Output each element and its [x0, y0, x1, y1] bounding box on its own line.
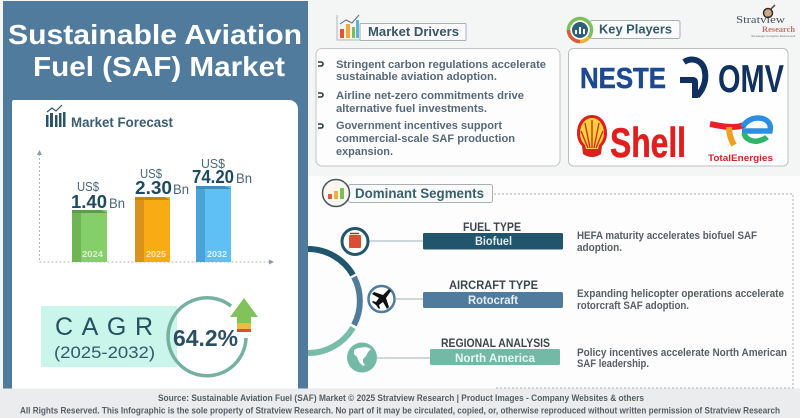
- panel: white forecast card: [12, 100, 298, 389]
- title: [8, 19, 302, 82]
- CAGR callout: (2025-2032): [54, 343, 155, 362]
- drivers list: alternative fuel investments.: [336, 103, 487, 115]
- bar: 2024: 2024: [82, 249, 103, 259]
- logo: OMV: [680, 58, 784, 101]
- logo: Stratview Research: Strategic Insights Delivered: [751, 34, 795, 38]
- heading: dominant segments: Dominant Segments: [355, 185, 484, 201]
- segment descriptions: [577, 230, 787, 370]
- panel: key players: [568, 5, 796, 166]
- heading: key players: [590, 20, 680, 38]
- value: 2032: [192, 157, 252, 187]
- segment: fuel type: FUEL TYPE: [463, 220, 521, 234]
- icon: growth arrow: [230, 298, 258, 332]
- value: 2032: Bn: [236, 170, 252, 186]
- chart axes: [40, 154, 270, 262]
- drivers list: Stringent carbon regulations accelerate: [336, 59, 546, 71]
- bar: 2032: [196, 186, 231, 262]
- value: 2024: [71, 180, 125, 212]
- logo: TotalEnergies: [708, 118, 773, 164]
- bar: 2025: 2025: [146, 249, 166, 259]
- segment: regional analysis: North America: [455, 353, 536, 365]
- logo: Neste: NESTE: [580, 63, 666, 95]
- heading: key players: Key Players: [599, 22, 672, 36]
- logo: Shell: [577, 115, 686, 166]
- segment: aircraft type: AIRCRAFT TYPE: [449, 278, 538, 292]
- panel: market drivers: [316, 15, 560, 166]
- drivers list: Government incentives support: [336, 120, 502, 132]
- segment descriptions: adoption.: [577, 242, 622, 254]
- icon: fuel can: [342, 228, 368, 254]
- title: Fuel (SAF) Market: [33, 51, 285, 82]
- value: 2025: 2.30: [135, 177, 172, 198]
- segment: fuel type: [423, 220, 563, 250]
- value: 2032: 74.20: [192, 167, 234, 187]
- segment descriptions: rotorcraft SAF adoption.: [577, 300, 689, 312]
- logo: Shell: Shell: [610, 119, 686, 166]
- panel: left title and forecast: [3, 1, 308, 389]
- value: 2025: Bn: [173, 181, 189, 197]
- CAGR callout: [41, 298, 258, 376]
- footer: [0, 388, 800, 418]
- icon: key players: [568, 18, 592, 42]
- CAGR callout: 64.2%: [173, 325, 238, 351]
- segment: aircraft type: [423, 278, 563, 308]
- heading: market forecast: Market Forecast: [71, 114, 173, 130]
- value: 2024: US$: [77, 180, 99, 194]
- logos panel: [568, 48, 788, 166]
- heading: market drivers: Market Drivers: [368, 24, 459, 39]
- drivers list: sustainable aviation adoption.: [336, 71, 497, 83]
- segment descriptions: HEFA maturity accelerates biofuel SAF: [577, 230, 757, 242]
- logo: Stratview Research: Research: [762, 25, 796, 34]
- icon: globe north america: [347, 342, 377, 372]
- bar: 2025: [135, 197, 170, 262]
- icon: market drivers chart: [337, 15, 360, 40]
- segment: fuel type: Biofuel: [475, 236, 512, 248]
- segment: aircraft type: Rotocraft: [468, 295, 518, 307]
- value: 2024: Bn: [109, 195, 125, 211]
- icon: market forecast chart: [46, 105, 66, 127]
- icon: airplane: [368, 286, 394, 312]
- value: 2025: US$: [140, 167, 162, 181]
- bar: 2024: [72, 210, 107, 262]
- icon: dominant segments: [322, 180, 350, 206]
- CAGR callout: CAGR: [55, 313, 153, 341]
- drivers list: expansion.: [336, 146, 393, 158]
- drivers list: [316, 48, 560, 166]
- logo: TotalEnergies: TotalEnergies: [708, 153, 773, 164]
- drivers list: commercial-scale SAF production: [336, 133, 515, 145]
- logo: Stratview Research: Stratview: [736, 15, 785, 26]
- segment: regional analysis: [430, 336, 560, 365]
- CAGR ring: [168, 298, 246, 376]
- title: Sustainable Aviation: [8, 19, 302, 50]
- value: 2025: [135, 167, 189, 198]
- panel: dominant segments: [308, 180, 793, 388]
- footer: Source: Sustainable Aviation Fuel (SAF) Market © 2025 Stratview Research | Product Images - Company Websites & others: [158, 393, 644, 404]
- segment descriptions: Expanding helicopter operations accelerate: [577, 288, 784, 300]
- connectors: [369, 241, 430, 358]
- logo: Stratview Research: [736, 5, 796, 38]
- value: 2024: 1.40: [71, 191, 107, 212]
- segment descriptions: SAF leadership.: [577, 358, 649, 370]
- arc: [308, 249, 360, 353]
- bar: 2032: 2032: [207, 249, 227, 259]
- drivers list: Airline net-zero commitments drive: [336, 90, 524, 102]
- segment: regional analysis: REGIONAL ANALYSIS: [441, 336, 550, 350]
- value: 2032: US$: [201, 157, 225, 171]
